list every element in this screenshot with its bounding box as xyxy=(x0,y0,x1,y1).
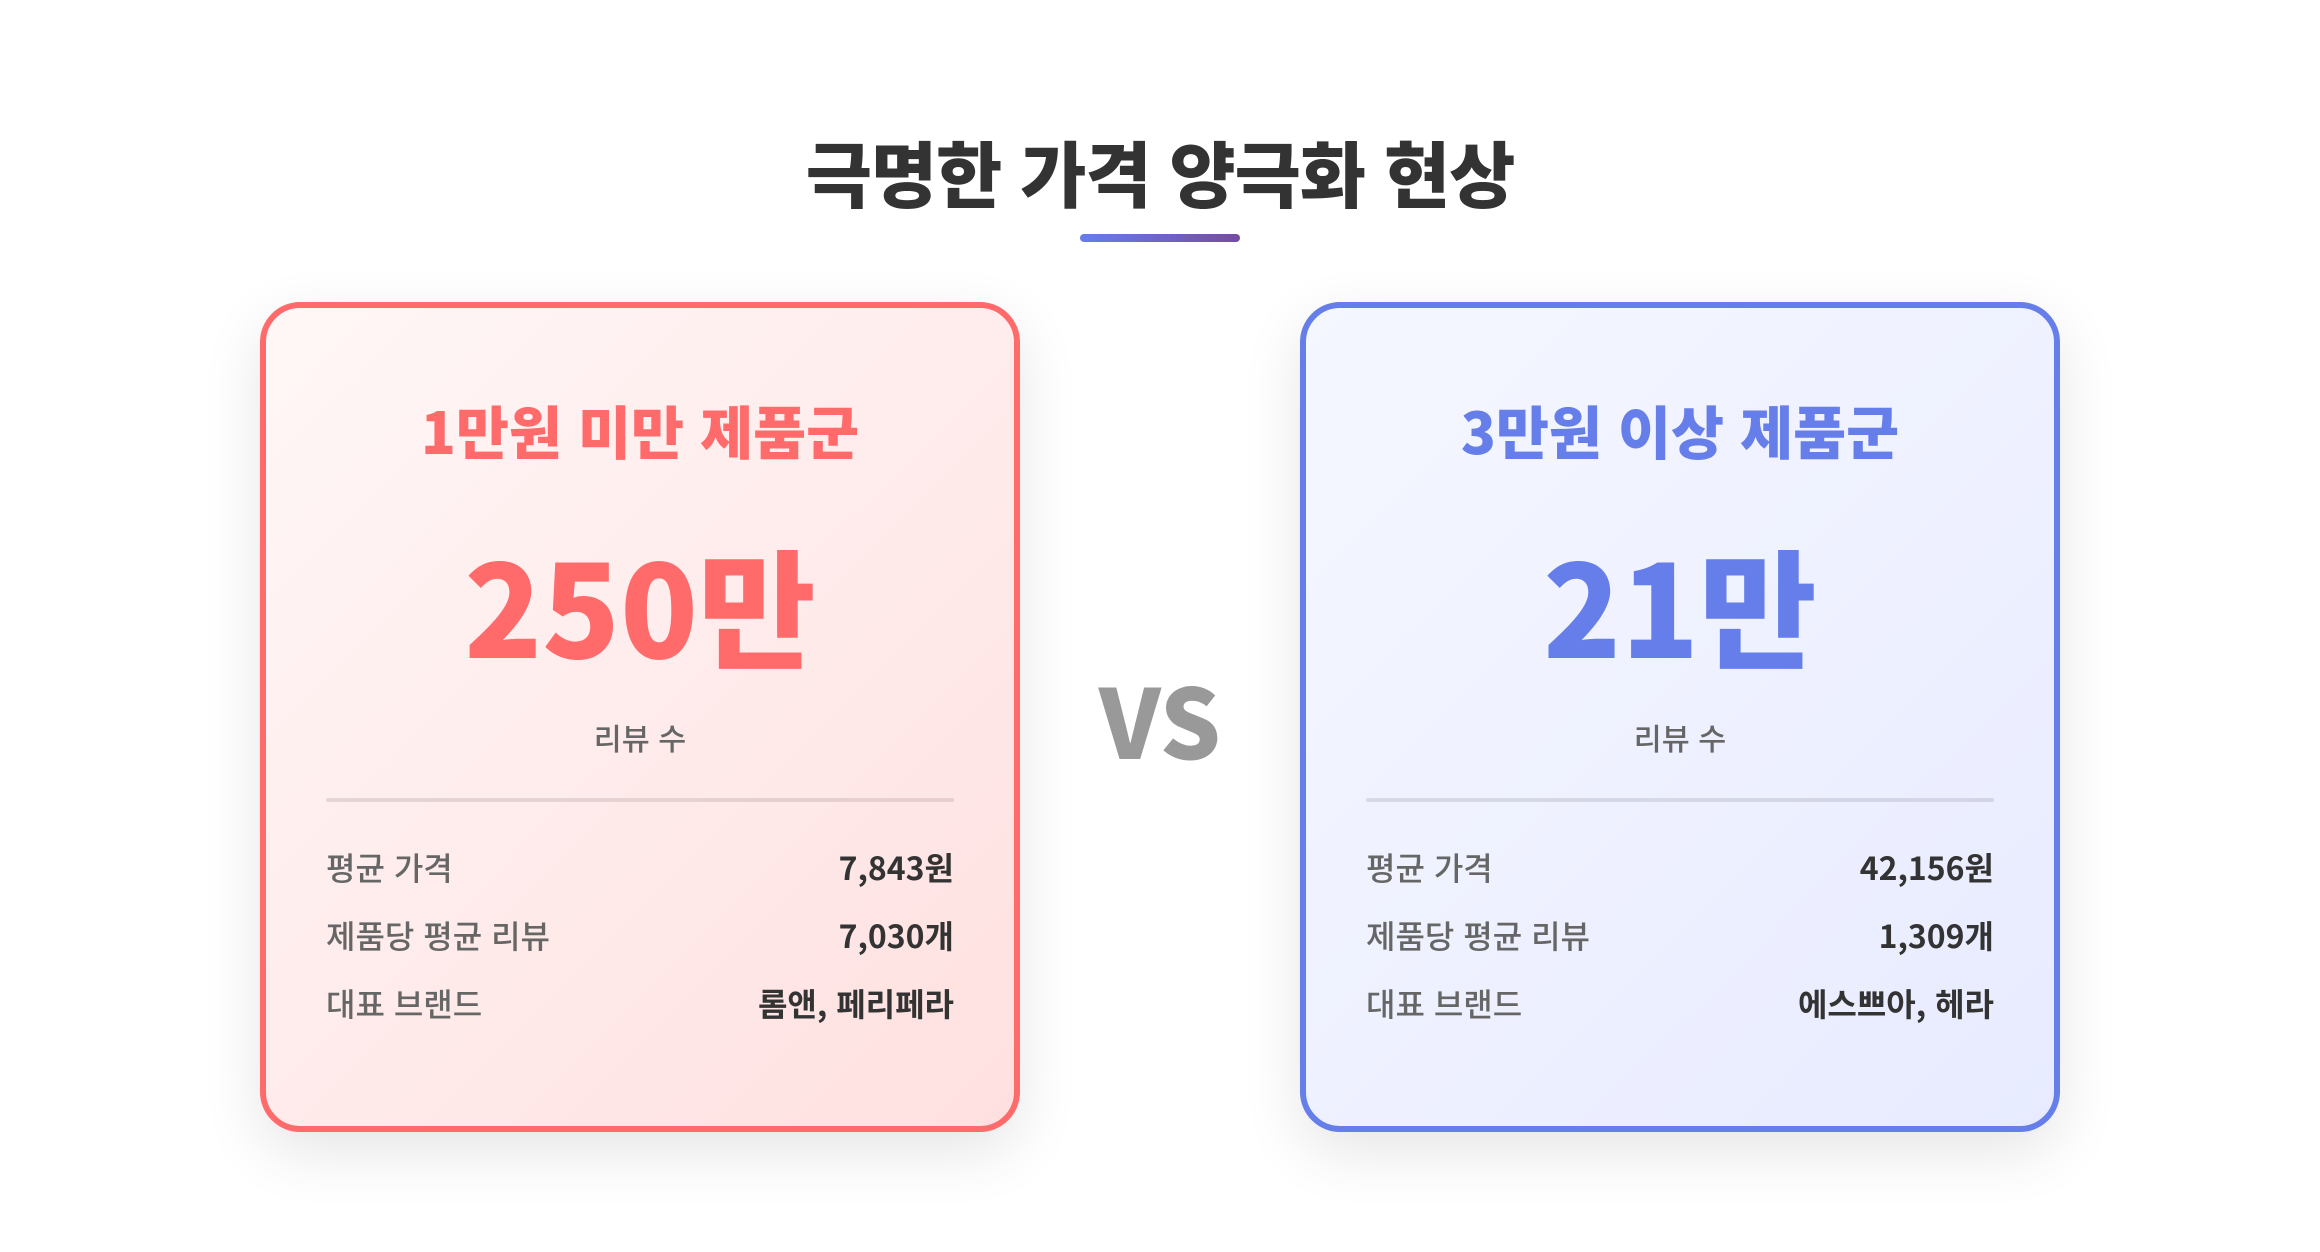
big number: review count: 21만 xyxy=(1543,510,1817,695)
title underline xyxy=(1080,234,1240,242)
row: average reviews per product xyxy=(1366,912,1994,958)
row: representative brands: 대표 브랜드 xyxy=(1366,980,1522,1026)
big number label: 리뷰 수 xyxy=(1634,715,1726,759)
row: average price xyxy=(326,844,954,890)
row: representative brands: 롬앤, 페리페라 xyxy=(758,980,954,1026)
panel: over 30,000 won products xyxy=(1300,302,2060,1132)
row: average reviews per product: 7,030개 xyxy=(839,912,954,958)
panel heading: 3만원 이상 제품군 xyxy=(1461,387,1899,471)
row: average price: 7,843원 xyxy=(839,844,954,890)
row: average reviews per product: 제품당 평균 리뷰 xyxy=(326,912,550,958)
row: average price: 42,156원 xyxy=(1860,844,1994,890)
row: average price xyxy=(1366,844,1994,890)
row: average reviews per product: 제품당 평균 리뷰 xyxy=(1366,912,1590,958)
row: average reviews per product: 1,309개 xyxy=(1879,912,1994,958)
big number label: 리뷰 수 xyxy=(594,715,686,759)
row: representative brands: 에스쁘아, 헤라 xyxy=(1798,980,1994,1026)
row: representative brands xyxy=(1366,980,1994,1026)
big number: review count: 250만 xyxy=(464,510,816,695)
title: 극명한 가격 양극화 현상 xyxy=(806,118,1514,223)
row: average price: 평균 가격 xyxy=(1366,844,1493,890)
panel heading: 1만원 미만 제품군 xyxy=(421,387,859,471)
row: representative brands: 대표 브랜드 xyxy=(326,980,482,1026)
VS label: VS xyxy=(1099,648,1221,787)
row: average price: 평균 가격 xyxy=(326,844,453,890)
row: average reviews per product xyxy=(326,912,954,958)
panel: under 10,000 won products xyxy=(260,302,1020,1132)
row: representative brands xyxy=(326,980,954,1026)
